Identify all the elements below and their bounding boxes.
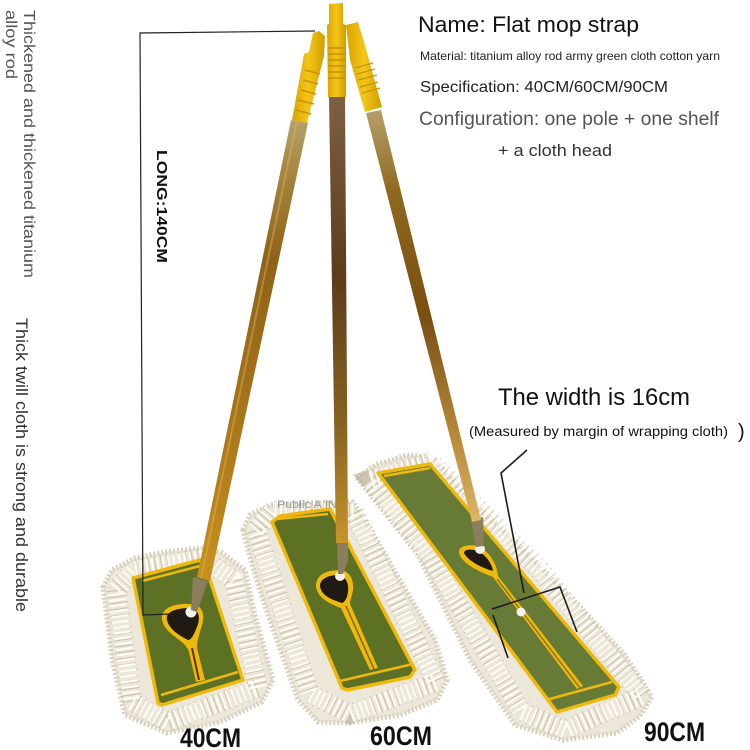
- pole: middle: [327, 3, 348, 543]
- mop head plate: [316, 543, 378, 670]
- mop 90CM: [357, 455, 652, 740]
- pad seams: [384, 468, 612, 700]
- cloth pad: 40CM mop: [133, 560, 243, 705]
- mop head plate: [162, 577, 208, 682]
- fringe: 90CM mop: [357, 455, 652, 740]
- fringe: 60CM mop: [243, 502, 447, 723]
- vertical label: twill cloth: Thick twill cloth is strong and durable: [12, 318, 30, 612]
- cloth pad: 60CM mop: [272, 509, 415, 690]
- pole: left: [197, 31, 325, 581]
- callout: measurement note: (Measured by margin of wrapping cloth): [469, 424, 728, 439]
- pad seams: [142, 566, 238, 695]
- size label: 90CM: 90CM: [644, 717, 705, 747]
- pad seams: [277, 514, 413, 681]
- text: configuration: Configuration: one pole + one shelf: [419, 109, 720, 130]
- dimension lines: 16cm width bracket: [492, 450, 577, 658]
- fringe: 40CM mop: [103, 548, 273, 733]
- text: configuration continued: + a cloth head: [498, 141, 612, 160]
- text: specification: Specification: 40CM/60CM/90CM: [420, 79, 668, 96]
- vertical label: alloy rod: Thickened and thickened titanium: [20, 10, 37, 278]
- vertical label: length 140cm: LONG:140CM: [153, 150, 170, 263]
- dimension line: 140cm length bracket: [140, 31, 315, 615]
- mop 60CM: [243, 502, 447, 723]
- cloth pad: 90CM mop: [378, 464, 619, 712]
- heading: product name: Name: Flat mop strap: [418, 12, 639, 37]
- mop 40CM: [103, 548, 273, 733]
- text: material: Material: titanium alloy rod army green cloth cotton yarn: [420, 49, 720, 63]
- callout: closing parenthesis: ): [738, 421, 745, 443]
- pole: right: [346, 22, 481, 522]
- callout: width heading: The width is 16cm: [498, 384, 690, 411]
- mop head plate: [459, 517, 583, 689]
- vertical label: alloy rod line 2: alloy rod: [2, 10, 19, 79]
- watermark: Public A IN: [277, 499, 337, 511]
